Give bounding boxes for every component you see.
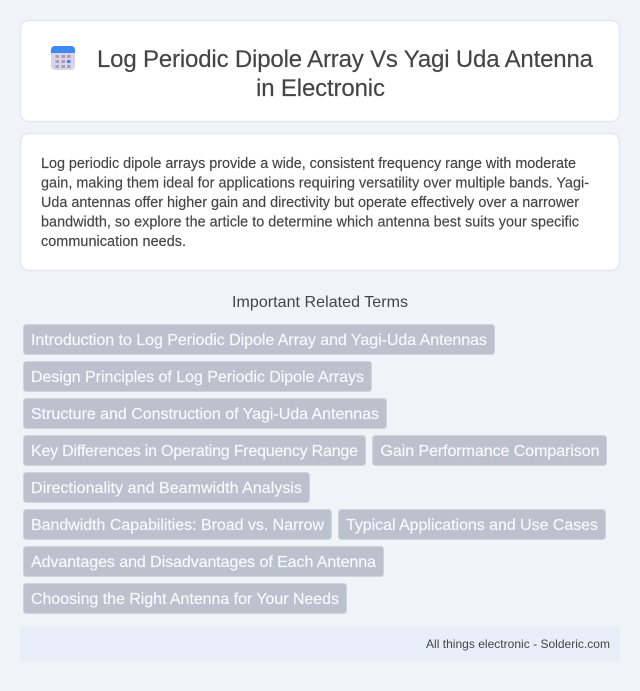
title: in Electronic <box>256 75 385 102</box>
tag: applications <box>338 510 606 540</box>
description text: Log periodic dipole arrays provide a wide, consistent frequency range with moderate <box>41 156 576 172</box>
tag list <box>24 324 606 614</box>
tag: directionality <box>24 472 310 502</box>
heading: important related terms: Important Related Terms <box>232 294 408 311</box>
tag: bandwidth: Bandwidth Capabilities: Broad vs. Narrow <box>31 517 324 534</box>
title: Log Periodic Dipole Array Vs Yagi Uda Antenna <box>97 46 594 73</box>
header panel <box>20 20 620 122</box>
title <box>97 46 594 102</box>
tag: introduction <box>24 324 494 354</box>
footer: All things electronic - Solderic.com <box>426 637 610 651</box>
tag: choosing <box>24 584 346 614</box>
tag: directionality: Directionality and Beamwidth Analysis <box>31 480 302 497</box>
tag: choosing: Choosing the Right Antenna for Your Needs <box>31 591 339 608</box>
footer <box>20 627 620 661</box>
tag: advantages <box>24 546 384 576</box>
tag: introduction: Introduction to Log Periodic Dipole Array and Yagi-Uda Antennas <box>31 332 487 349</box>
tag: design principles <box>24 362 372 392</box>
tag: structure: Structure and Construction of Yagi-Uda Antennas <box>31 406 379 423</box>
tag: applications: Typical Applications and Use Cases <box>346 517 598 534</box>
panel: description <box>20 134 620 270</box>
description text: Uda antennas offer higher gain and directivity but operate effectively over a narrower <box>41 195 579 211</box>
tag: gain: Gain Performance Comparison <box>380 443 600 460</box>
icon: calendar <box>51 46 75 70</box>
description text: bandwidth, so explore the article to determine which antenna best suits your specific <box>41 214 579 230</box>
tag: frequency range <box>24 436 366 466</box>
description text: gain, making them ideal for applications requiring versatility over multiple bands. Yagi- <box>41 176 589 192</box>
tag: gain <box>372 436 606 466</box>
tag: design principles: Design Principles of Log Periodic Dipole Arrays <box>31 369 364 386</box>
description text: communication needs. <box>41 234 186 250</box>
tag: advantages: Advantages and Disadvantages of Each Antenna <box>31 554 376 571</box>
description text <box>41 156 589 250</box>
tag: structure <box>24 398 386 428</box>
tag: bandwidth <box>24 510 332 540</box>
tag: frequency range: Key Differences in Operating Frequency Range <box>31 443 358 460</box>
